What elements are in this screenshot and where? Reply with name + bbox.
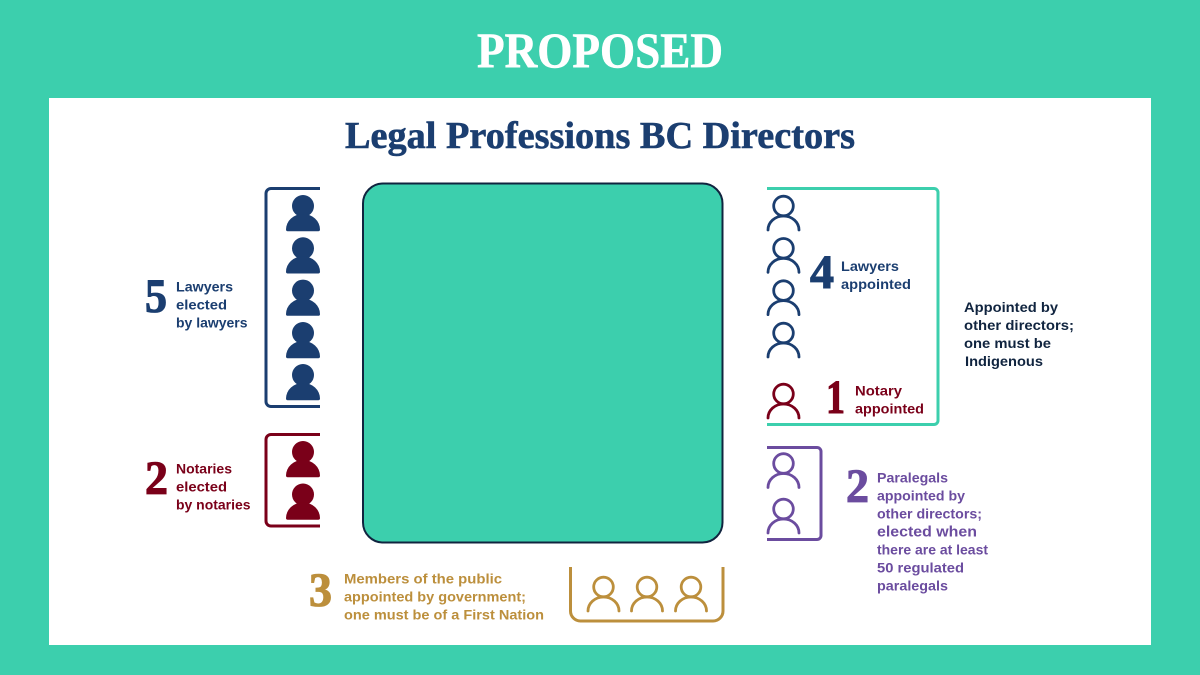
note: appointed by other directors: one must be: [964, 335, 1051, 351]
icons: three outlined members: [588, 577, 706, 611]
label: notaries elected by notaries: Notaries: [176, 461, 232, 477]
note: appointed by other directors: other directors;: [964, 317, 1074, 333]
label: notary appointed: Notary: [855, 382, 902, 398]
label: paralegals: paralegals: [877, 578, 948, 594]
icons: four outlined lawyers: [768, 196, 799, 357]
icons: two filled people: [286, 441, 320, 520]
label: lawyers elected by lawyers: Lawyers: [176, 279, 233, 295]
group: appointed by other directors: [767, 188, 1074, 424]
label: paralegals: appointed by: [877, 488, 965, 504]
bracket: paralegals: [767, 448, 821, 540]
label: lawyers elected by lawyers: by lawyers: [176, 315, 248, 331]
bracket: public: [570, 567, 723, 621]
bracket: lawyers elected: [266, 188, 320, 406]
number: 3: 3: [309, 564, 332, 617]
icon: outlined notary: [768, 384, 799, 418]
label: notaries elected by notaries: by notaries: [176, 497, 251, 513]
label: members of the public: Members of the public: [344, 571, 502, 587]
label: notary appointed: appointed: [855, 400, 924, 416]
number: 4: 4: [810, 246, 834, 299]
bracket: notaries elected: [266, 434, 320, 526]
number: 5: 5: [145, 270, 167, 323]
label: paralegals: elected when: [877, 524, 977, 540]
label: lawyers appointed: Lawyers: [841, 258, 899, 274]
label: lawyers elected by lawyers: [176, 279, 248, 331]
number: 2 paralegals: 2: [846, 460, 869, 513]
label: members of the public: appointed by government;: [344, 589, 526, 605]
note: appointed by other directors: [964, 299, 1074, 369]
label: notary appointed: [855, 382, 924, 416]
label: paralegals: [877, 470, 988, 594]
heading: proposed: PROPOSED: [477, 22, 723, 78]
label: paralegals: Paralegals: [877, 470, 948, 486]
number: 1: 1: [826, 371, 845, 424]
label: lawyers appointed: [841, 258, 911, 292]
label: members of the public: [344, 571, 544, 623]
label: paralegals: there are at least: [877, 542, 988, 558]
label: paralegals: 50 regulated: [877, 560, 964, 576]
group: notaries elected: [145, 434, 320, 526]
label: paralegals: other directors;: [877, 506, 982, 522]
group: members of the public: [309, 564, 723, 623]
note: appointed by other directors: Appointed by: [964, 299, 1058, 315]
label: notaries elected by notaries: [176, 461, 251, 513]
note: appointed by other directors: Indigenous: [965, 353, 1043, 369]
label: lawyers appointed: appointed: [841, 276, 911, 292]
title: Legal Professions BC Directors: [345, 115, 855, 157]
group: lawyers elected: [145, 188, 320, 406]
icons: five filled people: [286, 195, 320, 400]
label: lawyers elected by lawyers: elected: [176, 297, 227, 313]
number: 2 notaries: 2: [145, 452, 168, 505]
label: notaries elected by notaries: elected: [176, 479, 227, 495]
group: paralegals: [767, 448, 988, 594]
panel: white card: [49, 98, 1151, 645]
icons: two outlined paralegals: [768, 454, 799, 533]
central board square: [363, 184, 722, 542]
bracket: appointed: [767, 188, 938, 424]
label: members of the public: one must be of a First Nation: [344, 607, 544, 623]
